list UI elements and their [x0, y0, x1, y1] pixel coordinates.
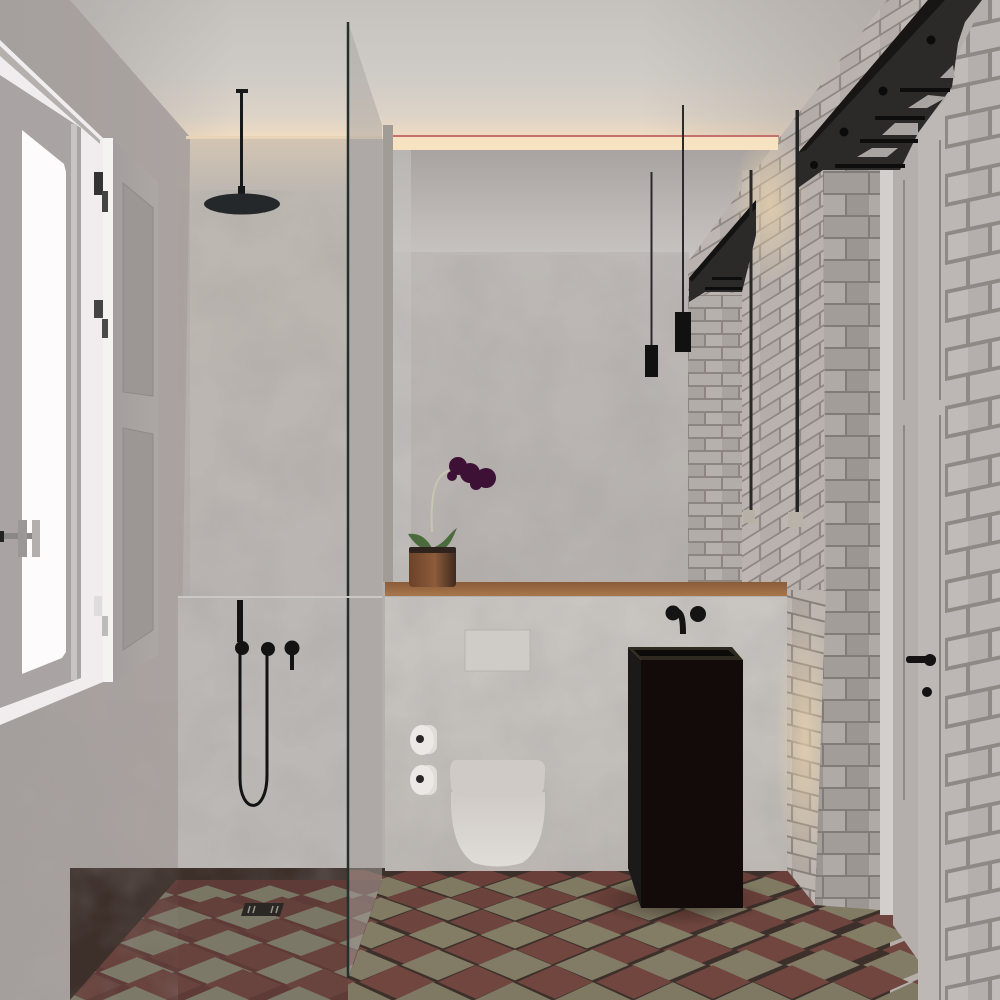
pillar side face [787, 590, 826, 905]
floor tiles in shower [60, 878, 390, 1000]
door frame [918, 100, 945, 1000]
shower back wall upper [190, 137, 350, 597]
glass panel tint [348, 22, 382, 978]
floor drain [241, 903, 284, 916]
floor shadow under basin [590, 874, 770, 926]
rod [788, 110, 803, 527]
door leaf [893, 133, 918, 960]
mirror edge highlight [393, 150, 411, 582]
flush plate [465, 630, 530, 671]
window shutter [103, 138, 158, 682]
shower head [204, 89, 280, 214]
toilet paper holders [410, 725, 437, 795]
pendant lamp right [675, 105, 691, 352]
shutter edge [103, 138, 113, 682]
shower back wall lower [178, 597, 350, 880]
ceiling light strip [186, 135, 779, 150]
window trim [0, 46, 100, 144]
shutter panel bottom [123, 428, 153, 650]
ceiling [70, 0, 887, 137]
small reflected steel beam [689, 200, 756, 302]
vase [409, 550, 456, 587]
far right brick wall [945, 0, 1000, 1000]
warm light on pillar [775, 600, 835, 880]
basin top [628, 647, 743, 660]
door handle [906, 654, 936, 697]
orchid flowers [447, 457, 496, 490]
wall mottling texture [0, 190, 787, 1000]
door panel lines [903, 180, 905, 800]
lower wall right of glass [385, 597, 787, 871]
orchid leaves [408, 528, 457, 552]
floor [70, 868, 918, 1000]
left wall [0, 0, 190, 1000]
beam bolts [810, 36, 936, 169]
window sash [0, 75, 81, 708]
wooden shelf [178, 582, 787, 598]
reflected brick pillar [688, 295, 742, 582]
reflected rod [743, 170, 755, 523]
door [880, 100, 945, 1000]
pedestal basin [628, 647, 743, 908]
mirror frame [383, 125, 393, 582]
basin side [628, 647, 641, 908]
window handle [0, 520, 40, 557]
wall-hung toilet [450, 760, 545, 866]
floor tiles right of glass [348, 870, 918, 1000]
orchid plant [408, 457, 496, 587]
glass panel edge [347, 22, 349, 978]
reflected wall [393, 252, 689, 582]
window [0, 40, 103, 725]
large steel beam [798, 0, 982, 188]
shower mixer and hose [235, 600, 300, 805]
window hinges [94, 172, 108, 636]
reflected ceiling [393, 150, 790, 260]
wall faucet [666, 606, 706, 634]
beam brick gaps [908, 95, 947, 108]
brick pillar [775, 170, 880, 910]
pillar front face [815, 170, 880, 910]
beam flange highlight [798, 0, 945, 153]
window frame [0, 40, 103, 725]
sash inner trim [71, 124, 77, 680]
brick side wall [688, 0, 930, 590]
warm light on bricks [732, 125, 808, 285]
shutter panel top [123, 183, 153, 396]
door jamb [880, 170, 893, 915]
basin front [641, 660, 743, 908]
pendant lamp left [645, 172, 658, 377]
window glass [22, 130, 66, 674]
mirror [393, 150, 790, 582]
beam rungs [835, 90, 950, 166]
orchid stem [432, 470, 452, 532]
